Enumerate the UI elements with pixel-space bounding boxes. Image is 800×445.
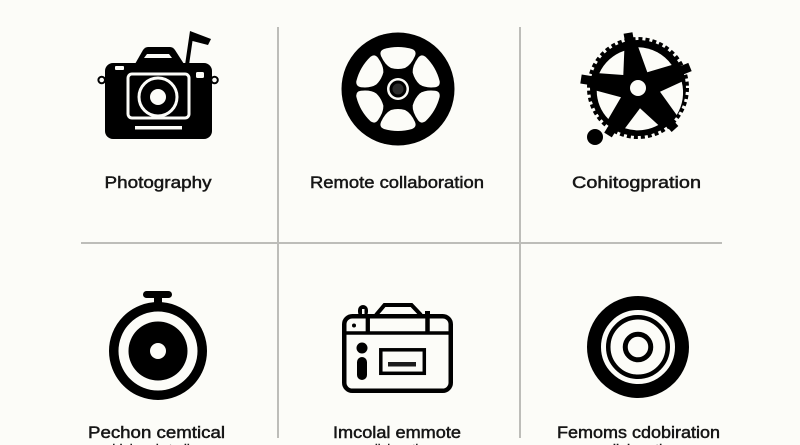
icon: stopwatch	[114, 291, 202, 395]
label: Imcolal emmote: Imcolal emmote	[333, 423, 461, 442]
label: Pechon cemtical: Pechon cemtical	[88, 423, 225, 442]
label: Cohitogpration: Cohitogpration	[572, 173, 701, 192]
label: Femoms cdobiration: Femoms cdobiration	[557, 423, 720, 442]
icon: camera with flag	[98, 31, 218, 139]
label: Photography: Photography	[104, 173, 212, 192]
icon: film reel wheel	[342, 32, 454, 146]
label: Remote collaboration: Remote collaboration	[310, 173, 484, 192]
icon: outlined camera case	[344, 305, 451, 391]
icon: gear with five spokes	[581, 33, 690, 145]
icon: concentric target	[594, 303, 682, 391]
